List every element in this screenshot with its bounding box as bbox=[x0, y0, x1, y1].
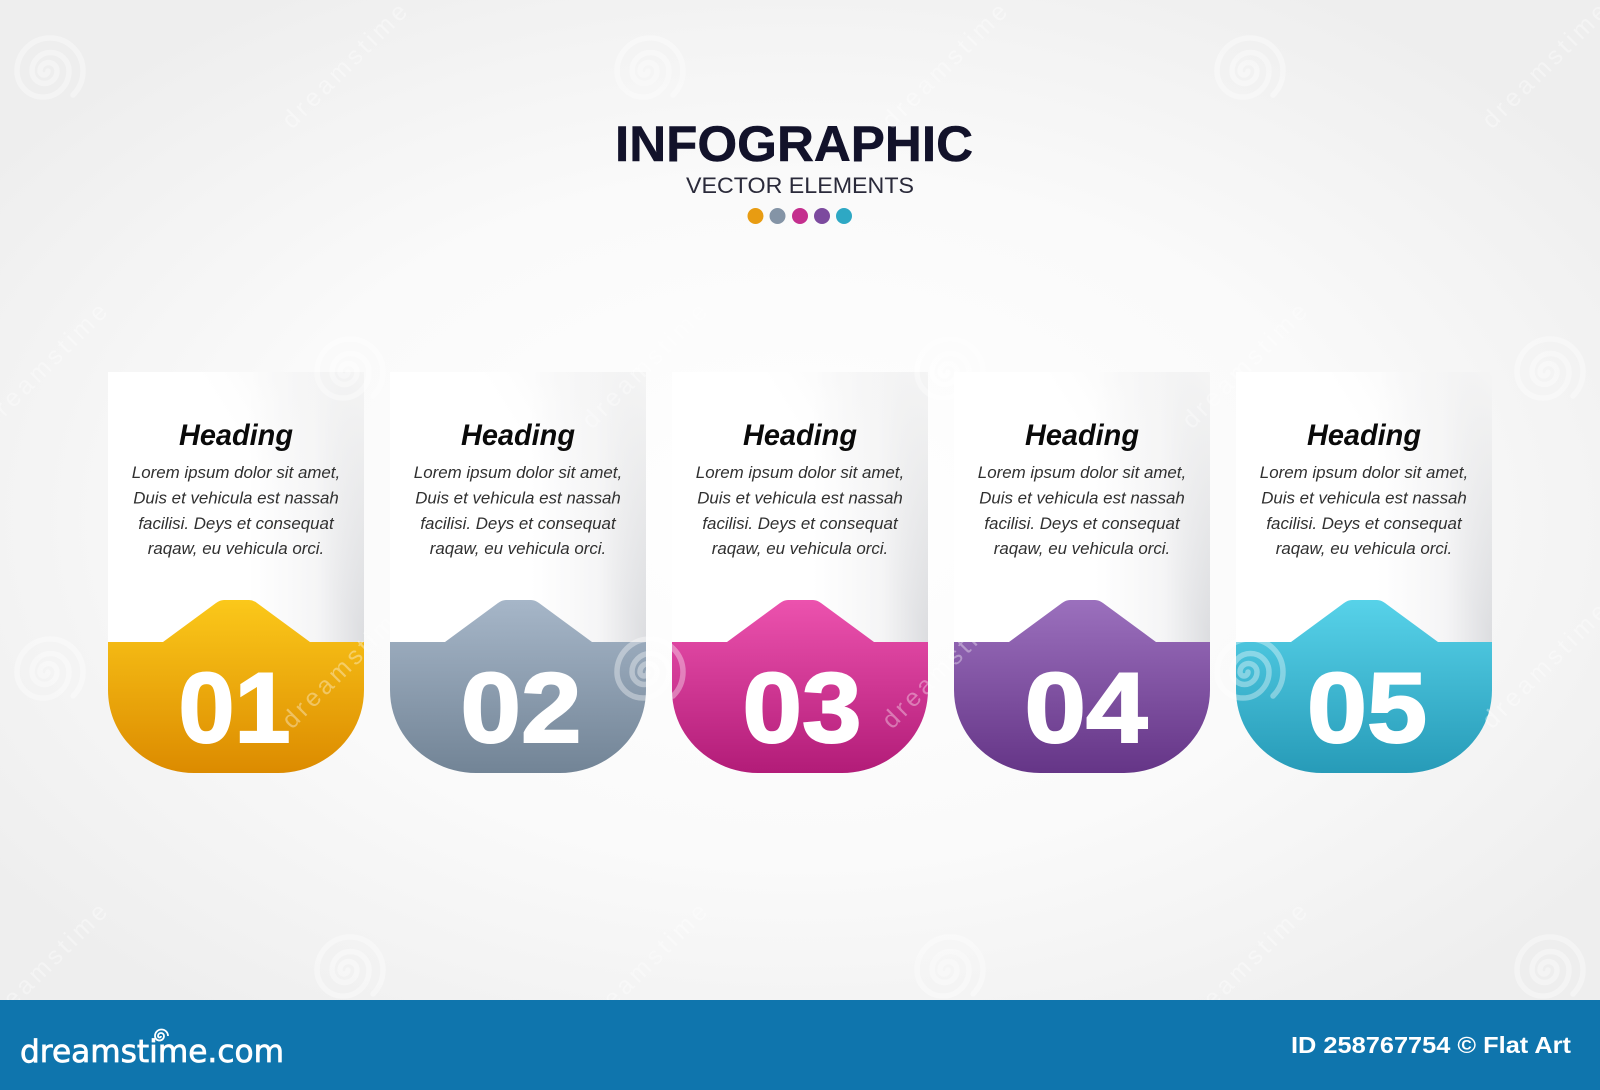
panel: step 02 bbox=[390, 372, 646, 773]
watermark overlay: dreamstime bbox=[1176, 898, 1313, 1034]
watermark overlay: dreamstime bbox=[876, 0, 1013, 134]
watermark overlay: dreamstime bbox=[276, 0, 413, 134]
body text: raqaw, eu vehicula orci. bbox=[994, 539, 1170, 558]
body text: Duis et vehicula est nassah bbox=[1261, 488, 1467, 508]
number badge bbox=[954, 600, 1210, 773]
card body bbox=[108, 372, 364, 643]
panel: step 01 bbox=[108, 372, 364, 773]
logo spiral icon bbox=[155, 1030, 168, 1040]
subtitle: VECTOR ELEMENTS bbox=[686, 173, 914, 198]
footer credit: ID 258767754 © Flat Art bbox=[1291, 1032, 1571, 1058]
number: 03 bbox=[742, 652, 862, 763]
body text: facilisi. Deys et consequat bbox=[1266, 514, 1463, 533]
number: 05 bbox=[1307, 652, 1427, 763]
card body bbox=[954, 372, 1210, 643]
body text: Lorem ipsum dolor sit amet, bbox=[132, 463, 340, 482]
body text: Lorem ipsum dolor sit amet, bbox=[978, 463, 1186, 482]
body text: Duis et vehicula est nassah bbox=[697, 488, 903, 508]
heading: Heading bbox=[179, 419, 293, 452]
heading: Heading bbox=[461, 419, 575, 452]
watermark overlay: dreamstime bbox=[876, 598, 1013, 734]
body text: Lorem ipsum dolor sit amet, bbox=[414, 463, 622, 482]
body text: raqaw, eu vehicula orci. bbox=[148, 539, 324, 558]
body text: Lorem ipsum dolor sit amet, bbox=[1260, 463, 1468, 482]
body text: facilisi. Deys et consequat bbox=[984, 514, 1181, 533]
body text: Lorem ipsum dolor sit amet, bbox=[696, 463, 904, 482]
footer logo: dreamstime.com bbox=[20, 1034, 284, 1070]
heading: Heading bbox=[743, 419, 857, 452]
card body bbox=[1236, 372, 1492, 643]
body text: raqaw, eu vehicula orci. bbox=[430, 539, 606, 558]
title: INFOGRAPHIC bbox=[615, 116, 973, 172]
number badge bbox=[108, 600, 364, 773]
number: 02 bbox=[460, 652, 582, 763]
watermark overlay: dreamstime bbox=[576, 298, 713, 434]
number: 04 bbox=[1024, 652, 1148, 763]
number badge bbox=[1236, 600, 1492, 773]
heading: Heading bbox=[1307, 419, 1421, 452]
body text: facilisi. Deys et consequat bbox=[138, 514, 335, 533]
card body bbox=[390, 372, 646, 643]
body text: facilisi. Deys et consequat bbox=[420, 514, 617, 533]
body text: facilisi. Deys et consequat bbox=[702, 514, 899, 533]
number badge bbox=[672, 600, 928, 773]
body text: raqaw, eu vehicula orci. bbox=[712, 539, 888, 558]
card body bbox=[672, 372, 928, 643]
colour dots bbox=[748, 208, 852, 224]
watermark overlay: dreamstime bbox=[276, 598, 413, 734]
watermark overlay: dreamstime bbox=[1176, 298, 1313, 434]
number: 01 bbox=[178, 652, 290, 763]
number badge bbox=[390, 600, 646, 773]
heading: Heading bbox=[1025, 419, 1139, 452]
body text: Duis et vehicula est nassah bbox=[979, 488, 1185, 508]
footer bar bbox=[0, 1000, 1600, 1090]
panel: step 04 bbox=[954, 372, 1210, 773]
body text: raqaw, eu vehicula orci. bbox=[1276, 539, 1452, 558]
body text: Duis et vehicula est nassah bbox=[415, 488, 621, 508]
title block bbox=[615, 116, 973, 224]
panel: step 05 bbox=[1236, 372, 1492, 773]
watermark overlay: dreamstime bbox=[576, 898, 713, 1034]
body text: Duis et vehicula est nassah bbox=[133, 488, 339, 508]
panel: step 03 bbox=[672, 372, 928, 773]
